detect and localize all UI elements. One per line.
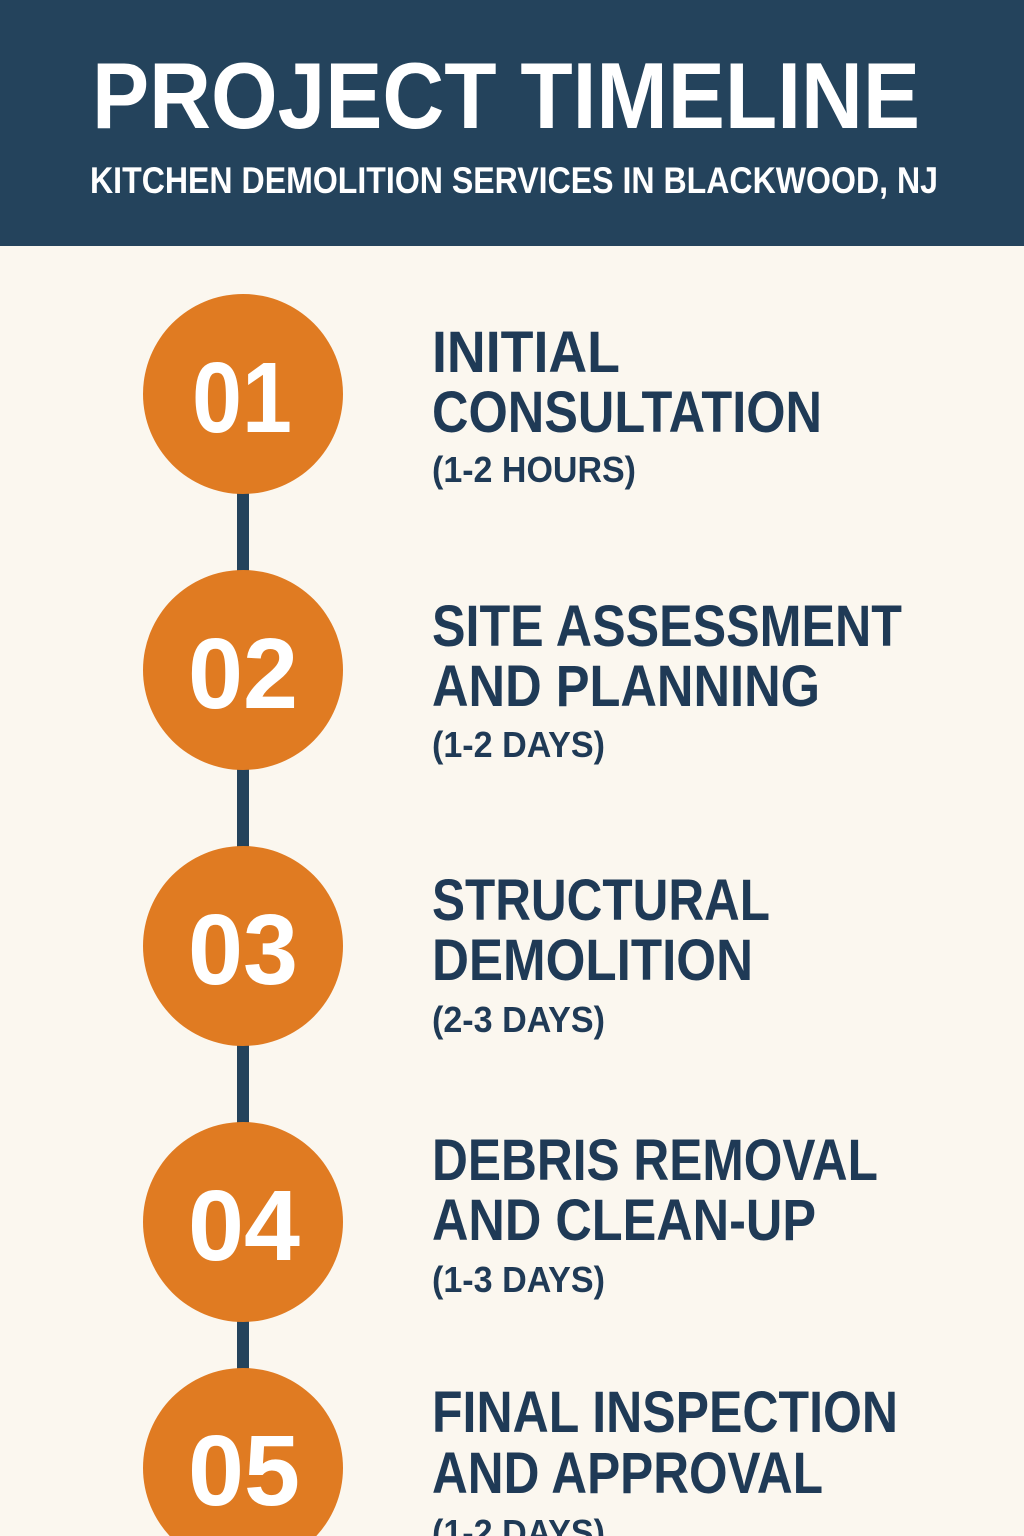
step 05: AND APPROVAL [432, 1441, 823, 1506]
step 03 [143, 846, 770, 1046]
title: PROJECT TIMELINE [92, 43, 920, 148]
step 04: AND CLEAN-UP [432, 1188, 816, 1253]
step 03: (2-3 DAYS) [432, 999, 605, 1040]
step 04: DEBRIS REMOVAL [432, 1128, 878, 1193]
step 01: INITIAL [432, 320, 620, 385]
step 03: STRUCTURAL [432, 868, 770, 933]
step 05: 05 [188, 1415, 300, 1527]
step 03: 03 [188, 894, 298, 1006]
step 02: SITE ASSESSMENT [432, 594, 902, 659]
timeline connector line [237, 394, 249, 1474]
step 01: CONSULTATION [432, 380, 822, 445]
step 02: 02 [188, 618, 298, 730]
step 04 [143, 1122, 878, 1322]
step 02: (1-2 DAYS) [432, 724, 605, 765]
step 05: FINAL INSPECTION [432, 1380, 898, 1445]
step 02 [143, 570, 902, 770]
step 05 [143, 1368, 898, 1536]
step 03: DEMOLITION [432, 928, 753, 993]
header banner [0, 0, 1024, 246]
step 01: 01 [192, 342, 292, 454]
step 02: AND PLANNING [432, 654, 820, 719]
step 04: (1-3 DAYS) [432, 1259, 605, 1300]
step 01: (1-2 HOURS) [432, 449, 636, 490]
step 01 [143, 294, 822, 494]
step 04: 04 [188, 1170, 300, 1282]
